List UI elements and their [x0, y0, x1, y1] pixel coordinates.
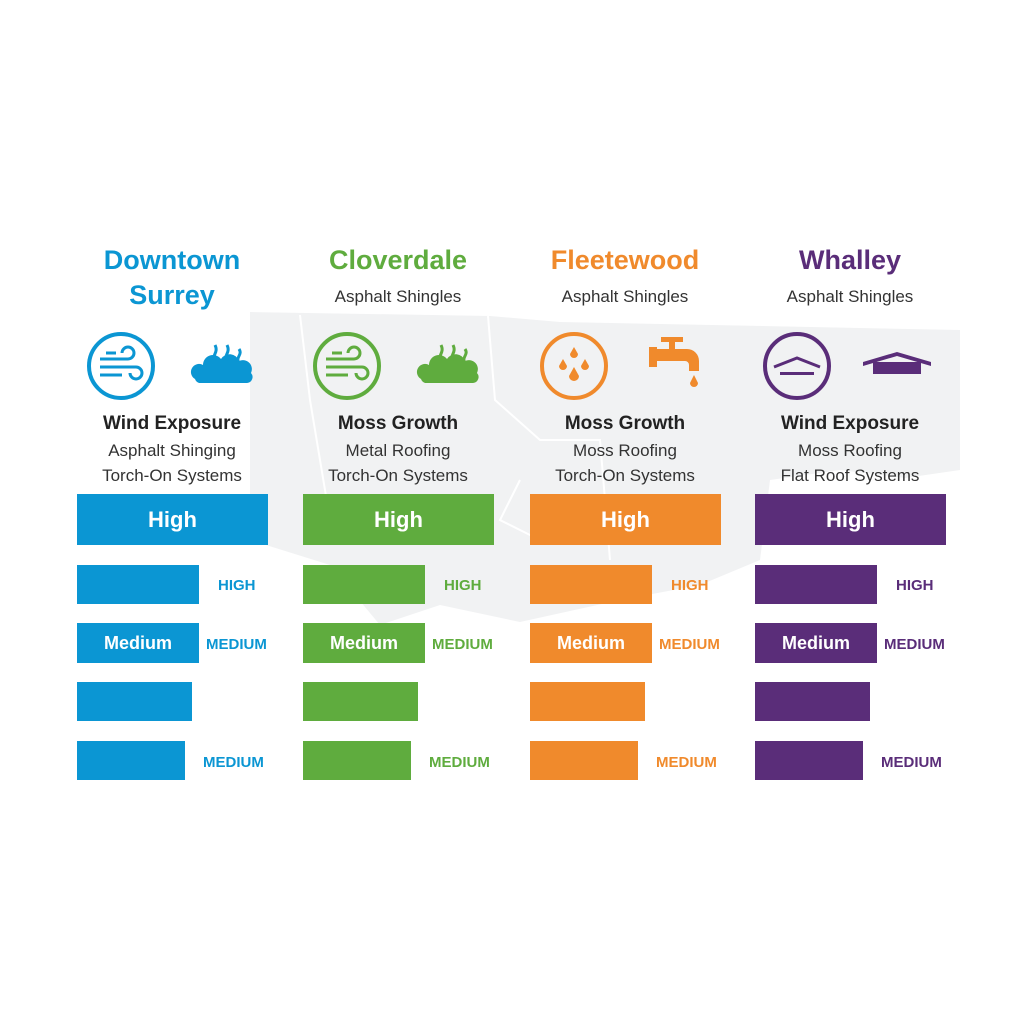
icon: flat roof	[863, 352, 931, 374]
column: Downtown Surrey: MEDIUM	[206, 636, 267, 653]
bars	[77, 494, 268, 545]
bars	[530, 494, 721, 545]
bars	[755, 494, 946, 545]
subtitle: Asphalt Shingles	[562, 287, 688, 306]
column: Whalley: Medium	[782, 632, 850, 652]
details: Metal Roofing	[346, 441, 450, 460]
heading: Wind Exposure	[781, 413, 919, 434]
subtitle: Asphalt Shingles	[335, 287, 461, 306]
column: Cloverdale	[303, 245, 494, 780]
heading: Wind Exposure	[103, 413, 241, 434]
details: Asphalt Shinging	[108, 441, 236, 460]
column: Cloverdale: Medium	[330, 632, 398, 652]
icon: wind	[313, 332, 381, 400]
column: Cloverdale: HIGH	[444, 577, 482, 594]
column: Downtown Surrey: HIGH	[218, 577, 256, 594]
details	[328, 441, 468, 485]
bars: High	[148, 506, 197, 532]
details: Moss Roofing	[798, 441, 902, 460]
details: Torch-On Systems	[328, 466, 468, 485]
column: Whalley: MEDIUM	[884, 636, 945, 653]
heading: Moss Growth	[565, 413, 685, 434]
icon: droplets	[540, 332, 608, 400]
bars	[303, 494, 494, 545]
heading: Moss Growth	[338, 413, 458, 434]
title: Cloverdale	[329, 245, 467, 275]
icon: moss cloud	[190, 344, 253, 383]
column: Downtown Surrey: MEDIUM	[203, 754, 264, 771]
column: Fleetewood	[530, 245, 721, 780]
column: Downtown Surrey: Medium	[104, 632, 172, 652]
column: Cloverdale: MEDIUM	[429, 754, 490, 771]
details	[781, 441, 919, 485]
column: Cloverdale: MEDIUM	[432, 636, 493, 653]
column: Downtown Surrey	[77, 245, 268, 780]
bars: High	[826, 506, 875, 532]
subtitle: Asphalt Shingles	[787, 287, 913, 306]
column: Whalley: MEDIUM	[881, 754, 942, 771]
details: Moss Roofing	[573, 441, 677, 460]
title: Downtown	[104, 245, 240, 275]
icon: faucet	[649, 337, 699, 387]
details	[555, 441, 695, 485]
column: Fleetewood: MEDIUM	[659, 636, 720, 653]
details: Torch-On Systems	[102, 466, 242, 485]
details	[102, 441, 242, 485]
icon: roof circle	[763, 332, 831, 400]
bars: High	[374, 506, 423, 532]
column: Fleetewood: MEDIUM	[656, 754, 717, 771]
title	[104, 245, 240, 310]
details: Flat Roof Systems	[781, 466, 919, 485]
column: Whalley	[755, 245, 946, 780]
icon: moss	[416, 344, 479, 383]
column: Fleetewood: Medium	[557, 632, 625, 652]
column: Whalley: HIGH	[896, 577, 934, 594]
icon: wind	[87, 332, 155, 400]
title: Whalley	[799, 245, 901, 275]
title: Fleetewood	[551, 245, 699, 275]
title: Surrey	[129, 280, 215, 310]
bars: High	[601, 506, 650, 532]
details: Torch-On Systems	[555, 466, 695, 485]
column: Fleetewood: HIGH	[671, 577, 708, 594]
